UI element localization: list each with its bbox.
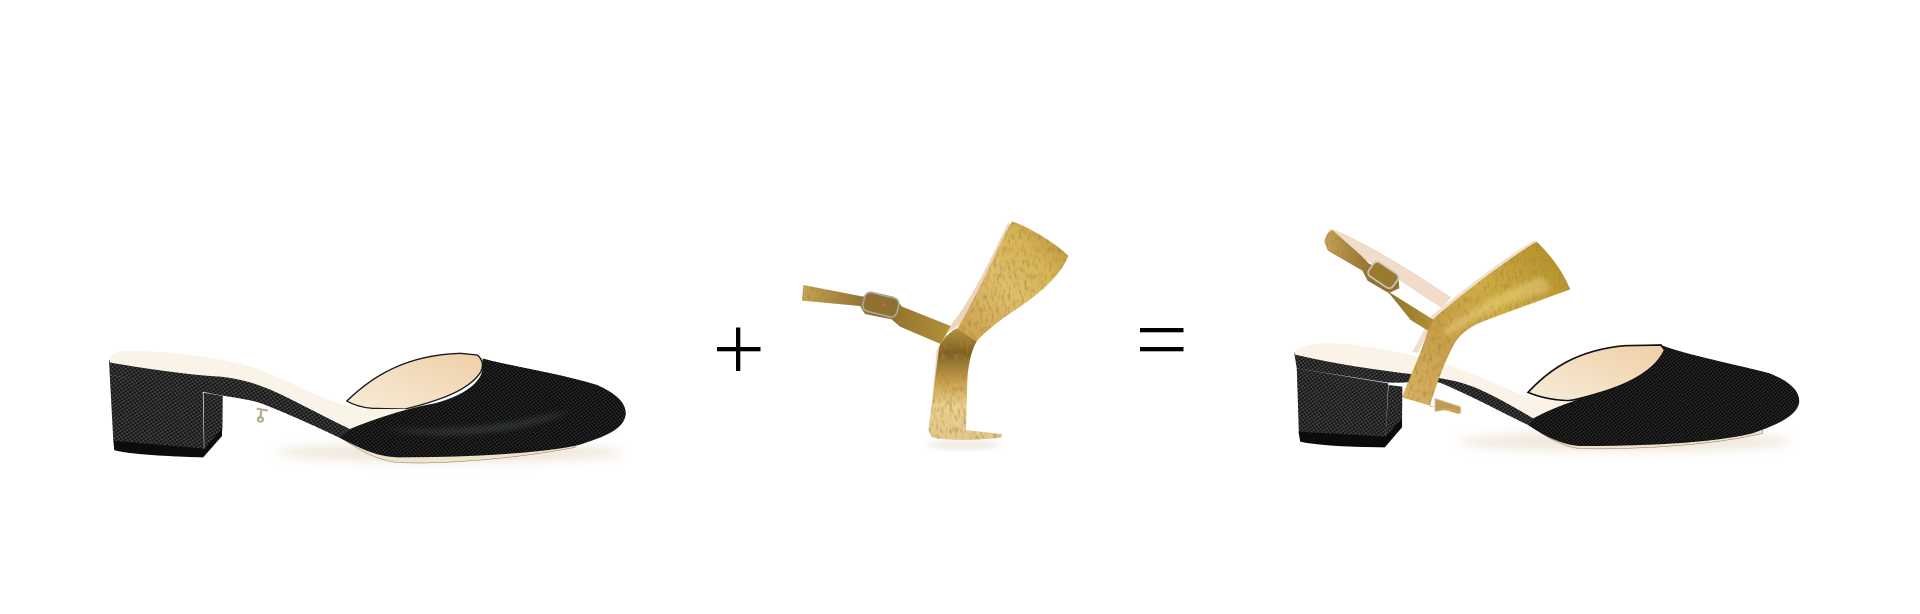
equals sign [1140, 328, 1184, 351]
back strap lining [1326, 229, 1450, 307]
photo: gold ankle strap [802, 222, 1068, 450]
sole edge [1528, 423, 1763, 449]
thin ankle strap [1324, 231, 1434, 331]
ankle strap band [802, 285, 951, 344]
strap lining [930, 223, 1013, 430]
buckle [1366, 260, 1400, 290]
small buckle tail [1435, 398, 1461, 413]
heel block front [110, 375, 204, 450]
inner lining [347, 353, 483, 409]
photo: black mule shoe [109, 351, 626, 463]
toe vamp [1528, 345, 1799, 446]
insole [1295, 343, 1569, 418]
heel block front [1297, 368, 1388, 438]
wide gold strap [1402, 242, 1570, 414]
heel block side [204, 393, 223, 449]
buckle [845, 291, 900, 318]
soft shadow [927, 440, 1000, 450]
plus sign [717, 328, 760, 371]
cream sole edge [339, 437, 575, 463]
insole edge strip [109, 359, 350, 437]
strap highlight [1442, 277, 1552, 337]
buckle pin [257, 409, 268, 422]
vertical lower strap [928, 328, 1002, 440]
heel base [1298, 419, 1402, 447]
photo: assembled shoe with gold strap [1294, 229, 1799, 452]
heel base [113, 429, 222, 457]
floor shadow [1459, 432, 1790, 452]
wide upper strap [957, 222, 1068, 343]
heel block side [1385, 385, 1402, 437]
insole edge strip [1294, 352, 1533, 425]
wide strap lining [1412, 241, 1538, 353]
inner lining [1528, 345, 1665, 401]
toe highlight [383, 410, 571, 435]
toe vamp [339, 358, 626, 457]
floor shadow [276, 443, 623, 463]
insole [110, 351, 407, 429]
